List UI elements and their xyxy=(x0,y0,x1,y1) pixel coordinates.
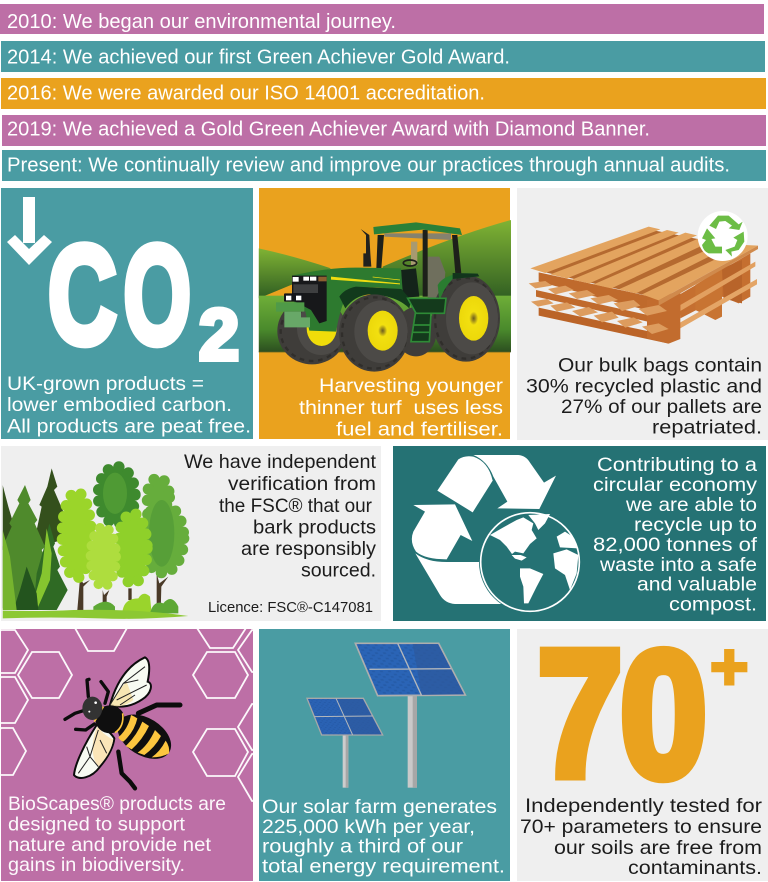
text: circular economy: recycle up to xyxy=(634,514,757,536)
panel: lower CO2 xyxy=(1,188,253,439)
text: independently tested: contaminants. xyxy=(628,857,762,879)
banner: 2019: 2019: We achieved a Gold Green Achiever Award with Diamond Banner. xyxy=(7,118,650,140)
banner: 2014 xyxy=(1,41,765,72)
text: BioScapes: gains in biodiversity. xyxy=(8,854,185,876)
text: UK-grown products: lower embodied carbon. xyxy=(7,394,232,416)
text: bulk bags: Our bulk bags contain xyxy=(558,354,762,376)
text: independent verification: sourced. xyxy=(301,560,376,582)
front right wheel xyxy=(339,294,410,372)
rear wheel right xyxy=(432,275,500,362)
banner: 2019 xyxy=(2,115,766,146)
timeline banners xyxy=(0,4,766,181)
text: UK-grown products xyxy=(7,373,251,438)
text: independent verification: are responsibly xyxy=(241,538,376,560)
text: bulk bags: 30% recycled plastic and xyxy=(526,376,762,398)
hood and body xyxy=(292,268,403,332)
text: UK-grown products: All products are peat free. xyxy=(7,416,251,438)
text: solar farm xyxy=(262,796,505,878)
text: UK-grown products: UK-grown products = xyxy=(7,373,204,395)
text: BioScapes: designed to support xyxy=(8,814,186,836)
text: independent verification xyxy=(184,451,376,582)
text: BioScapes: BioScapes® products are xyxy=(8,793,226,815)
text: bulk bags: 27% of our pallets are xyxy=(561,396,762,418)
text: BioScapes xyxy=(8,793,226,876)
big 70+ figure: 7 xyxy=(538,614,623,814)
banner: 2016: 2016: We were awarded our ISO 14001 accreditation. xyxy=(7,82,485,104)
text: independently tested xyxy=(520,795,762,879)
text: circular economy: circular economy xyxy=(593,474,757,496)
big CO2 lettering: 2 xyxy=(199,296,239,376)
panel: solar farm xyxy=(259,629,510,881)
icon: recycling arrows with globe xyxy=(412,455,581,613)
big CO2 lettering: O xyxy=(124,217,191,373)
illustration: solar panels xyxy=(307,643,465,788)
banner: 2014: 2014: We achieved our first Green Achiever Gold Award. xyxy=(7,46,510,68)
panel: FSC verification xyxy=(1,446,381,621)
text: harvesting: thinner turf uses less xyxy=(299,397,503,419)
rear fender xyxy=(438,273,479,302)
text: independent verification: verification from xyxy=(228,473,376,495)
panel: biodiversity xyxy=(0,628,270,881)
panel: harvesting xyxy=(259,188,511,440)
text: bulk bags: repatriated. xyxy=(652,416,762,438)
text: independent verification: bark products xyxy=(253,516,376,538)
panel: circular economy xyxy=(393,446,766,621)
icon: down arrow xyxy=(7,197,52,265)
rear wheels behind xyxy=(395,307,437,356)
text: licence: Licence: FSC®-C147081 xyxy=(208,600,373,616)
big 70+ figure xyxy=(538,613,749,815)
illustration: tractor on hills xyxy=(259,220,511,372)
big 70+ figure: + xyxy=(710,629,749,703)
text: independently tested: Independently tested for xyxy=(525,795,762,817)
big CO2 lettering xyxy=(48,217,239,376)
text: circular economy xyxy=(593,454,758,616)
big 70+ figure: 0 xyxy=(620,613,707,815)
banner: 2010: 2010: We began our environmental journey. xyxy=(7,10,396,33)
text: solar farm: 225,000 kWh per year, xyxy=(262,816,475,838)
text: bulk bags xyxy=(526,354,762,438)
text: circular economy: 82,000 tonnes of xyxy=(593,534,758,556)
text: independently tested: our soils are free from xyxy=(554,837,762,859)
text: harvesting: fuel and fertiliser. xyxy=(336,418,503,440)
text: solar farm: roughly a third of our xyxy=(262,836,463,858)
panel: bulk bags and pallets xyxy=(517,188,768,440)
text: circular economy: Contributing to a xyxy=(597,454,757,476)
steps xyxy=(408,298,446,342)
illustration: stacked pallets xyxy=(529,211,758,344)
icon: recycling badge xyxy=(698,211,748,261)
decorative honeycomb xyxy=(0,628,270,801)
text: harvesting xyxy=(299,375,503,440)
text: harvesting: Harvesting younger xyxy=(319,375,503,397)
text: independently tested: 70+ parameters to ensure xyxy=(520,816,762,838)
text: BioScapes: nature and provide net xyxy=(8,834,212,856)
banner: 2016 xyxy=(1,78,766,109)
text: independent verification: We have independent xyxy=(184,451,376,473)
text: independent verification: the FSC® that our xyxy=(219,495,372,517)
text: circular economy: compost. xyxy=(669,594,757,616)
banner: present: Present: We continually review and improve our practices through annual audits. xyxy=(7,154,730,176)
text: circular economy: we are able to xyxy=(625,494,757,516)
banner: 2010 xyxy=(0,4,764,34)
text: circular economy: waste into a safe xyxy=(599,554,757,576)
illustration: bee xyxy=(65,657,180,788)
text: circular economy: and valuable xyxy=(637,574,757,596)
text: solar farm: total energy requirement. xyxy=(262,856,505,878)
illustration: forest xyxy=(3,467,188,619)
cab xyxy=(384,233,451,240)
panel: 70+ parameters xyxy=(517,613,768,881)
big CO2 lettering: C xyxy=(48,218,117,373)
text: solar farm: Our solar farm generates xyxy=(262,796,497,818)
